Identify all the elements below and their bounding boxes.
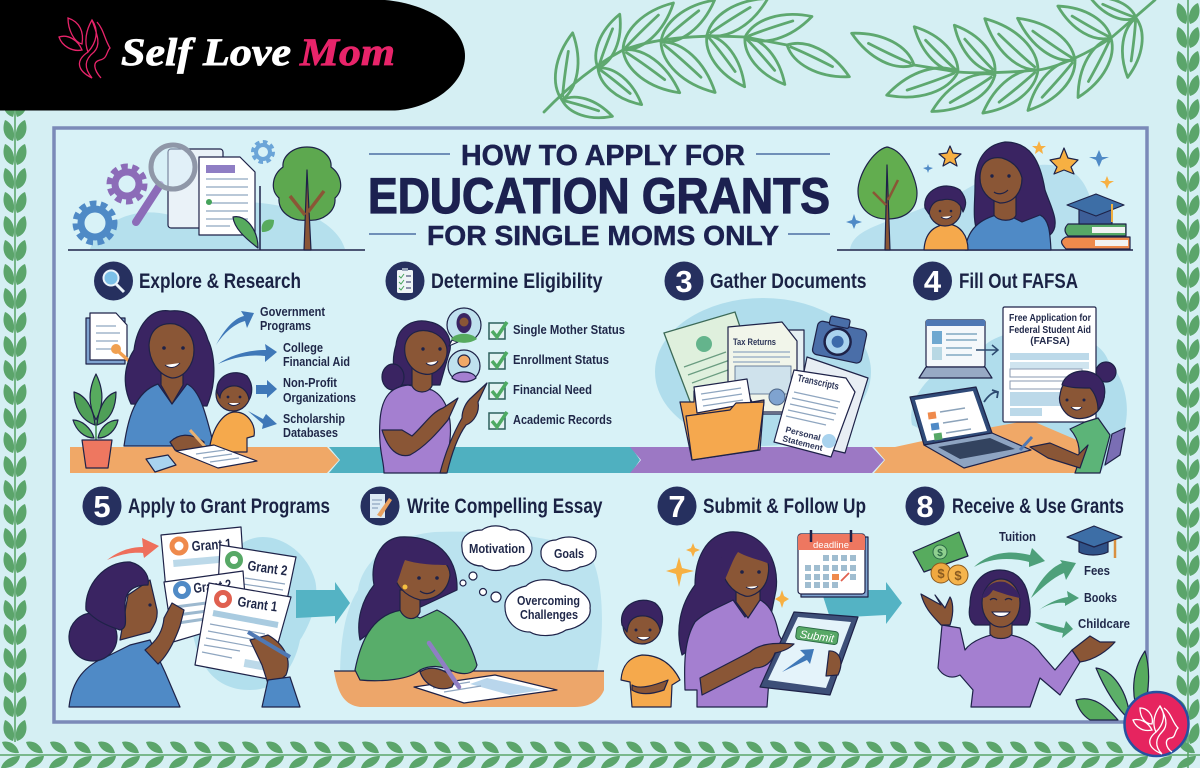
step 8 heading bbox=[906, 486, 1124, 526]
step 4 illustration: FAFSA form: Federal Student Aid bbox=[1009, 325, 1091, 336]
title: HOW TO APPLY FOR bbox=[461, 140, 745, 172]
step 7 heading bbox=[658, 486, 866, 526]
step 1 heading: Explore & Research bbox=[139, 270, 301, 293]
step 2 heading: Determine Eligibility bbox=[431, 270, 603, 293]
step 8 illustration: plant corner bbox=[1076, 651, 1149, 720]
step 7 illustration: tablet bbox=[700, 612, 858, 695]
step 8 labels bbox=[999, 530, 1130, 631]
step 5 illustration: grant forms bbox=[161, 527, 296, 679]
arrow: step 5 to step 6 bbox=[296, 582, 350, 624]
step 7 sparkles bbox=[666, 543, 789, 608]
forearm and pointing hand bbox=[700, 643, 794, 695]
step 3 illustration: open folder bbox=[680, 379, 764, 460]
icon: logo woman and leaf bbox=[59, 18, 110, 78]
step 3 illustration: transcripts and personal statement: Transcripts bbox=[796, 373, 840, 393]
step 8 illustration: money and coins: $ bbox=[954, 568, 962, 583]
step 1 illustration: notebook and phone bbox=[146, 445, 257, 472]
step 1 illustration: mother bbox=[124, 311, 214, 452]
step 1 illustration: document bbox=[86, 313, 129, 364]
icon: stars and sparkles bbox=[846, 141, 1114, 229]
step 5 heading: Apply to Grant Programs bbox=[128, 495, 330, 518]
checkbox: enrollment status: Enrollment Status bbox=[513, 353, 609, 367]
top right branch decoration bbox=[847, 0, 1155, 122]
left leaf border bbox=[0, 110, 30, 742]
thought bubbles bbox=[460, 572, 501, 602]
step 2 checklist bbox=[489, 322, 625, 429]
checkbox: single mother status: Single Mother Status bbox=[513, 323, 625, 337]
step 1 labels: Databases bbox=[283, 426, 338, 440]
step 8 illustration: joyful woman bbox=[921, 570, 1115, 707]
hand: right open bbox=[1072, 636, 1115, 662]
icon: books and graduation cap bbox=[1062, 194, 1130, 249]
logo banner bbox=[0, 0, 465, 110]
checkbox: academic records: Academic Records bbox=[513, 413, 612, 427]
icon: tree bbox=[273, 147, 341, 250]
brand name accent: Mom bbox=[299, 31, 395, 74]
step 8 labels: Childcare bbox=[1078, 617, 1130, 631]
step 6 heading: Write Compelling Essay bbox=[407, 495, 603, 518]
step 7 illustration: tablet: Submit bbox=[799, 629, 836, 645]
step 3 heading bbox=[664, 262, 866, 300]
step 3 illustration: transcripts and personal statement: Personal bbox=[785, 424, 822, 443]
step 4 arrow bbox=[984, 390, 998, 402]
step 5 heading: 5 bbox=[93, 489, 111, 524]
icon: sprout bbox=[233, 186, 274, 250]
step 8 illustration: money and coins: $ bbox=[937, 566, 945, 581]
step 8 illustration: graduation cap bbox=[1067, 526, 1122, 558]
checkbox: financial need: Financial Need bbox=[513, 383, 592, 397]
step 1 illustration: table band bbox=[70, 447, 339, 473]
icon: purple gear bbox=[111, 168, 143, 200]
icon: tree bbox=[858, 147, 917, 250]
step 5 red arrow bbox=[107, 538, 159, 560]
step 7 illustration: calendar bbox=[798, 530, 868, 597]
form: grant 1 front bbox=[195, 583, 291, 679]
step 2 illustration: teal band bbox=[329, 447, 640, 473]
step 6 illustration: background blob bbox=[340, 532, 602, 680]
step 4 illustration: FAFSA form bbox=[1003, 307, 1096, 422]
icon: clipboard badge bbox=[386, 262, 424, 300]
step 7 heading: 7 bbox=[668, 489, 686, 524]
bottom leaf border bbox=[0, 740, 1200, 768]
main framed panel bbox=[54, 128, 1147, 722]
step 6 illustration: desk bbox=[334, 671, 604, 707]
step 4 illustration: FAFSA form: Free Application for bbox=[1009, 313, 1091, 324]
cloud: overcoming challenges: Overcoming bbox=[517, 594, 580, 608]
step 4 heading: 4 bbox=[924, 264, 942, 299]
step 1 illustration: plant bbox=[73, 374, 118, 468]
step 1 labels: Programs bbox=[260, 319, 311, 333]
step 7 illustration: child bbox=[621, 600, 680, 707]
step 2 illustration: woman pointing bbox=[380, 321, 487, 473]
step 3 illustration: transcripts and personal statement: Statement bbox=[782, 433, 824, 453]
title: EDUCATION GRANTS bbox=[368, 168, 830, 224]
step 7 illustration: calendar: deadline bbox=[813, 540, 849, 551]
step 4 illustration: orange desk bbox=[874, 420, 1100, 473]
step 4 illustration: FAFSA form: (FAFSA) bbox=[1030, 336, 1070, 347]
cloud: overcoming challenges bbox=[505, 580, 590, 636]
hand holding forms bbox=[145, 603, 184, 664]
step 1 illustration: child bbox=[209, 373, 254, 452]
step 1 labels: College bbox=[283, 341, 323, 355]
step 3 illustration: tax returns document: Tax Returns bbox=[733, 337, 776, 348]
step 1 heading bbox=[94, 262, 301, 300]
step 8 illustration: money and coins: $ bbox=[937, 548, 943, 559]
step 3 illustration: camera bbox=[812, 313, 869, 364]
cloud: goals: Goals bbox=[554, 547, 584, 561]
step 6 illustration: woman writing bbox=[355, 537, 477, 681]
mother bbox=[965, 142, 1055, 250]
brand name: Self Love bbox=[121, 31, 291, 74]
step 2 heading bbox=[386, 262, 603, 300]
title: FOR SINGLE MOMS ONLY bbox=[427, 220, 779, 251]
icon: magnifying glass badge bbox=[94, 262, 133, 300]
top left branch decoration bbox=[544, 0, 854, 124]
step 3 illustration: certificate bbox=[664, 312, 762, 412]
step 5 illustration: woman from behind bbox=[69, 562, 300, 707]
cloud: motivation: Motivation bbox=[469, 542, 525, 556]
step 6 illustration: hand and pen bbox=[420, 643, 459, 689]
step 7 heading: Submit & Follow Up bbox=[703, 495, 866, 518]
right leaf border bbox=[1173, 0, 1200, 768]
left forearm and pointing hand bbox=[382, 398, 458, 456]
form: grant 1 back: Grant 1 bbox=[191, 535, 232, 554]
step 4 illustration: small laptop bbox=[919, 320, 998, 378]
step 8 arrows bbox=[974, 548, 1079, 638]
avatar: mother bbox=[447, 308, 481, 346]
step 2 avatars bbox=[447, 308, 481, 382]
form: grant 1 back bbox=[161, 527, 244, 590]
step 6 illustration: notebook bbox=[414, 675, 557, 703]
form: grant 2 lower: Grant 2 bbox=[193, 576, 232, 596]
step 1 labels: Non-Profit bbox=[283, 376, 338, 390]
icon: blue gear bbox=[77, 205, 113, 241]
step 8 illustration: money and coins bbox=[913, 532, 968, 585]
step 1 labels: Financial Aid bbox=[283, 355, 350, 369]
icon: front document bbox=[199, 157, 255, 235]
step 1 labels: Scholarship bbox=[283, 412, 345, 426]
form: grant 2 lower bbox=[164, 571, 247, 642]
hand: left raised bbox=[921, 594, 953, 625]
step 1 labels bbox=[260, 305, 356, 440]
step 4 illustration: background blob bbox=[911, 330, 1127, 473]
step 8 labels: Fees bbox=[1084, 564, 1110, 578]
step 8 labels: Tuition bbox=[999, 530, 1036, 544]
corner logo badge bbox=[1124, 692, 1188, 756]
step 8 labels: Books bbox=[1084, 591, 1117, 605]
icon: back document bbox=[168, 149, 223, 228]
right arm and pointing hand bbox=[440, 383, 487, 473]
step 3 illustration: tax returns document bbox=[728, 322, 804, 414]
step 3 illustration: background blob bbox=[655, 298, 871, 446]
child bbox=[924, 186, 968, 250]
form: grant 2 back: Grant 2 bbox=[247, 557, 289, 579]
step 1 arrows bbox=[216, 311, 277, 429]
step 3 heading: 3 bbox=[675, 264, 693, 299]
form: grant 2 back bbox=[218, 545, 296, 600]
step 8 heading: Receive & Use Grants bbox=[952, 495, 1124, 518]
step 1 labels: Government bbox=[260, 305, 326, 319]
step 5 illustration: background blob bbox=[190, 537, 316, 690]
step 3 heading: Gather Documents bbox=[710, 270, 866, 293]
step 6 heading bbox=[360, 486, 603, 526]
icon: magnifier bbox=[136, 145, 195, 222]
step 1 labels: Organizations bbox=[283, 391, 356, 405]
step 3 illustration: transcripts and personal statement bbox=[774, 357, 868, 457]
icon: pencil and paper badge bbox=[360, 486, 400, 526]
cloud: overcoming challenges: Challenges bbox=[520, 608, 578, 622]
title bbox=[368, 140, 830, 251]
form: grant 1 front: Grant 1 bbox=[237, 593, 279, 615]
step 5 heading bbox=[82, 486, 330, 526]
avatar: person bbox=[448, 350, 480, 382]
step 6 thought clouds bbox=[460, 526, 596, 636]
step 8 heading: 8 bbox=[916, 489, 934, 524]
step 4 illustration: large laptop bbox=[910, 387, 1031, 468]
step 4 heading: Fill Out FAFSA bbox=[959, 270, 1078, 293]
header illustration left: gears, magnifier, documents, tree bbox=[68, 143, 365, 250]
icon: small blue gear bbox=[254, 143, 272, 161]
step 4 illustration: girl bbox=[1020, 362, 1125, 473]
header illustration right: mother, child, tree, books bbox=[837, 141, 1133, 250]
step 4 heading bbox=[913, 262, 1078, 300]
arrow: step 7 to step 8 bbox=[821, 582, 902, 624]
step 7 illustration: woman with tablet bbox=[679, 532, 788, 707]
step 3 illustration: purple band bbox=[630, 447, 884, 473]
